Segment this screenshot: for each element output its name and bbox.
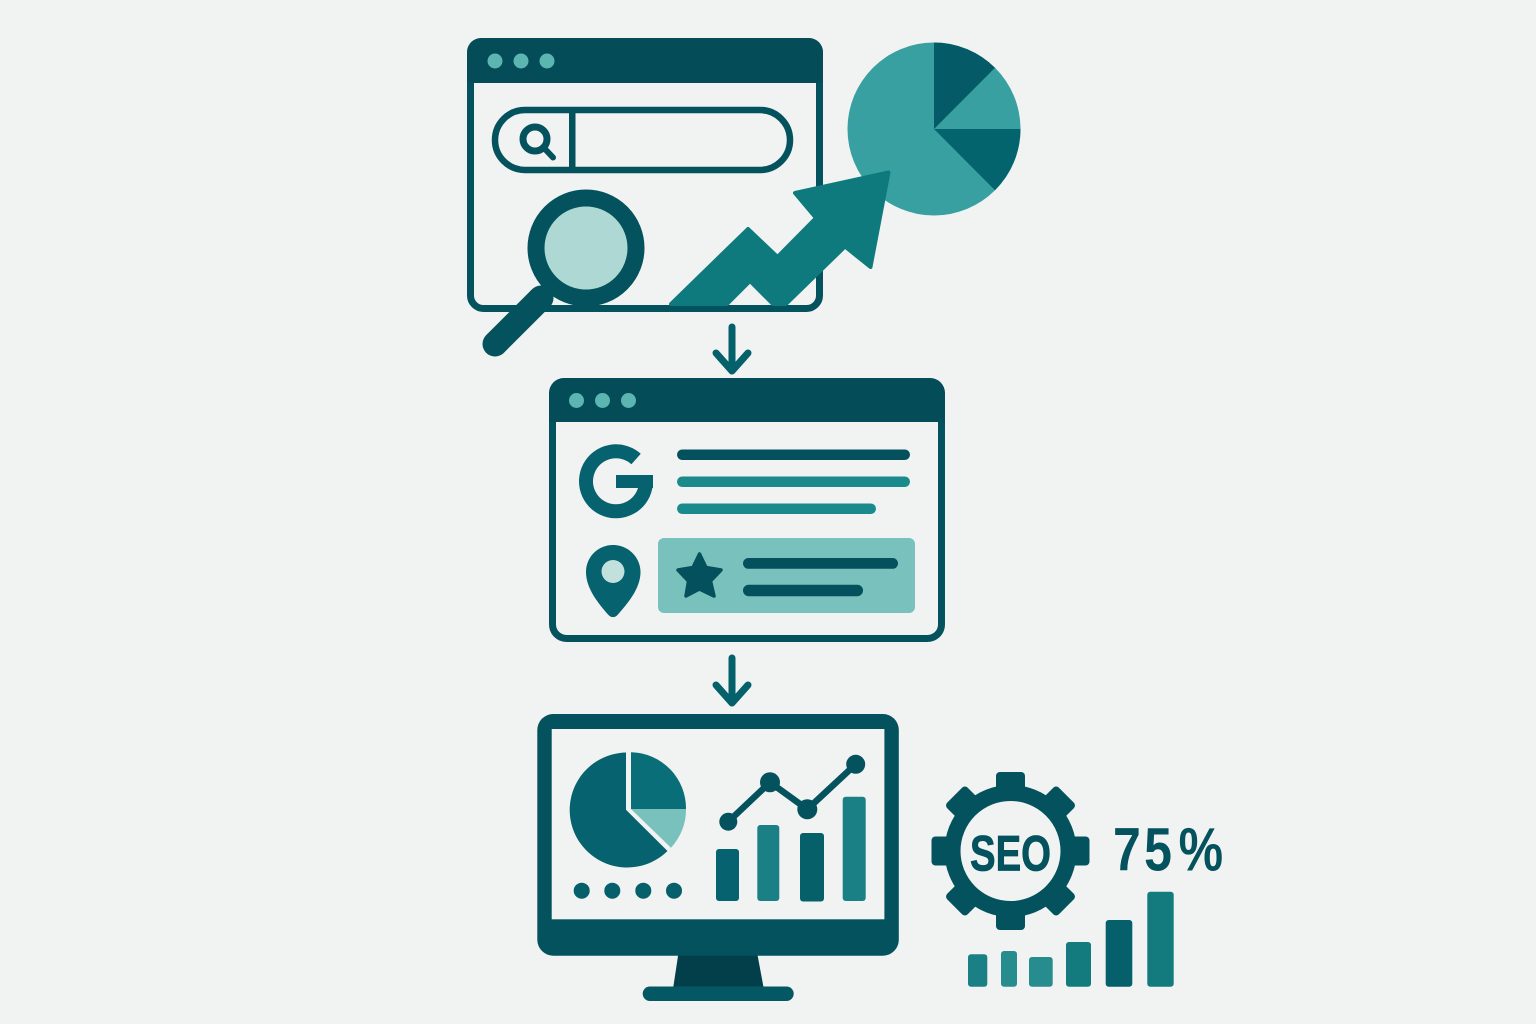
icon: SEO gear: [932, 772, 1090, 930]
results title bar: [549, 378, 945, 422]
arrow: down to analytics monitor: [716, 658, 748, 703]
result text lines: [677, 450, 910, 514]
icon: large magnifying glass: [495, 198, 636, 344]
monitor body: [537, 714, 899, 956]
metric: 75 percent: 75%: [1113, 816, 1223, 884]
arrow: down to search results: [716, 327, 748, 371]
chart: monitor line graph: [719, 755, 865, 831]
listing text lines: [743, 558, 898, 596]
search bar: [495, 110, 790, 170]
arrow: rising zigzag trend arrow: [671, 172, 888, 304]
monitor screen: [552, 729, 884, 919]
legend dots: [574, 883, 682, 899]
highlighted local listing: [658, 538, 915, 613]
panel: analytics monitor: [537, 714, 899, 1001]
panel: search results browser window: [549, 378, 945, 638]
results frame: [552, 382, 942, 638]
window control dots: [488, 54, 554, 68]
panel: search browser window: [467, 38, 823, 308]
gear label: SEO: [970, 826, 1051, 882]
monitor stand: [673, 954, 764, 987]
chart: large pie chart: [848, 42, 1020, 216]
browser title bar: [467, 38, 823, 83]
results window dots: [569, 393, 636, 408]
chart: rising bar chart: [968, 892, 1174, 987]
chart: monitor bars: [716, 797, 866, 902]
browser frame: [470, 42, 820, 308]
chart: monitor pie chart: [570, 752, 686, 867]
icon: letter G: [586, 451, 653, 511]
icon: location pin: [586, 545, 640, 617]
monitor base: [643, 986, 794, 1001]
icon: star: [678, 554, 721, 596]
